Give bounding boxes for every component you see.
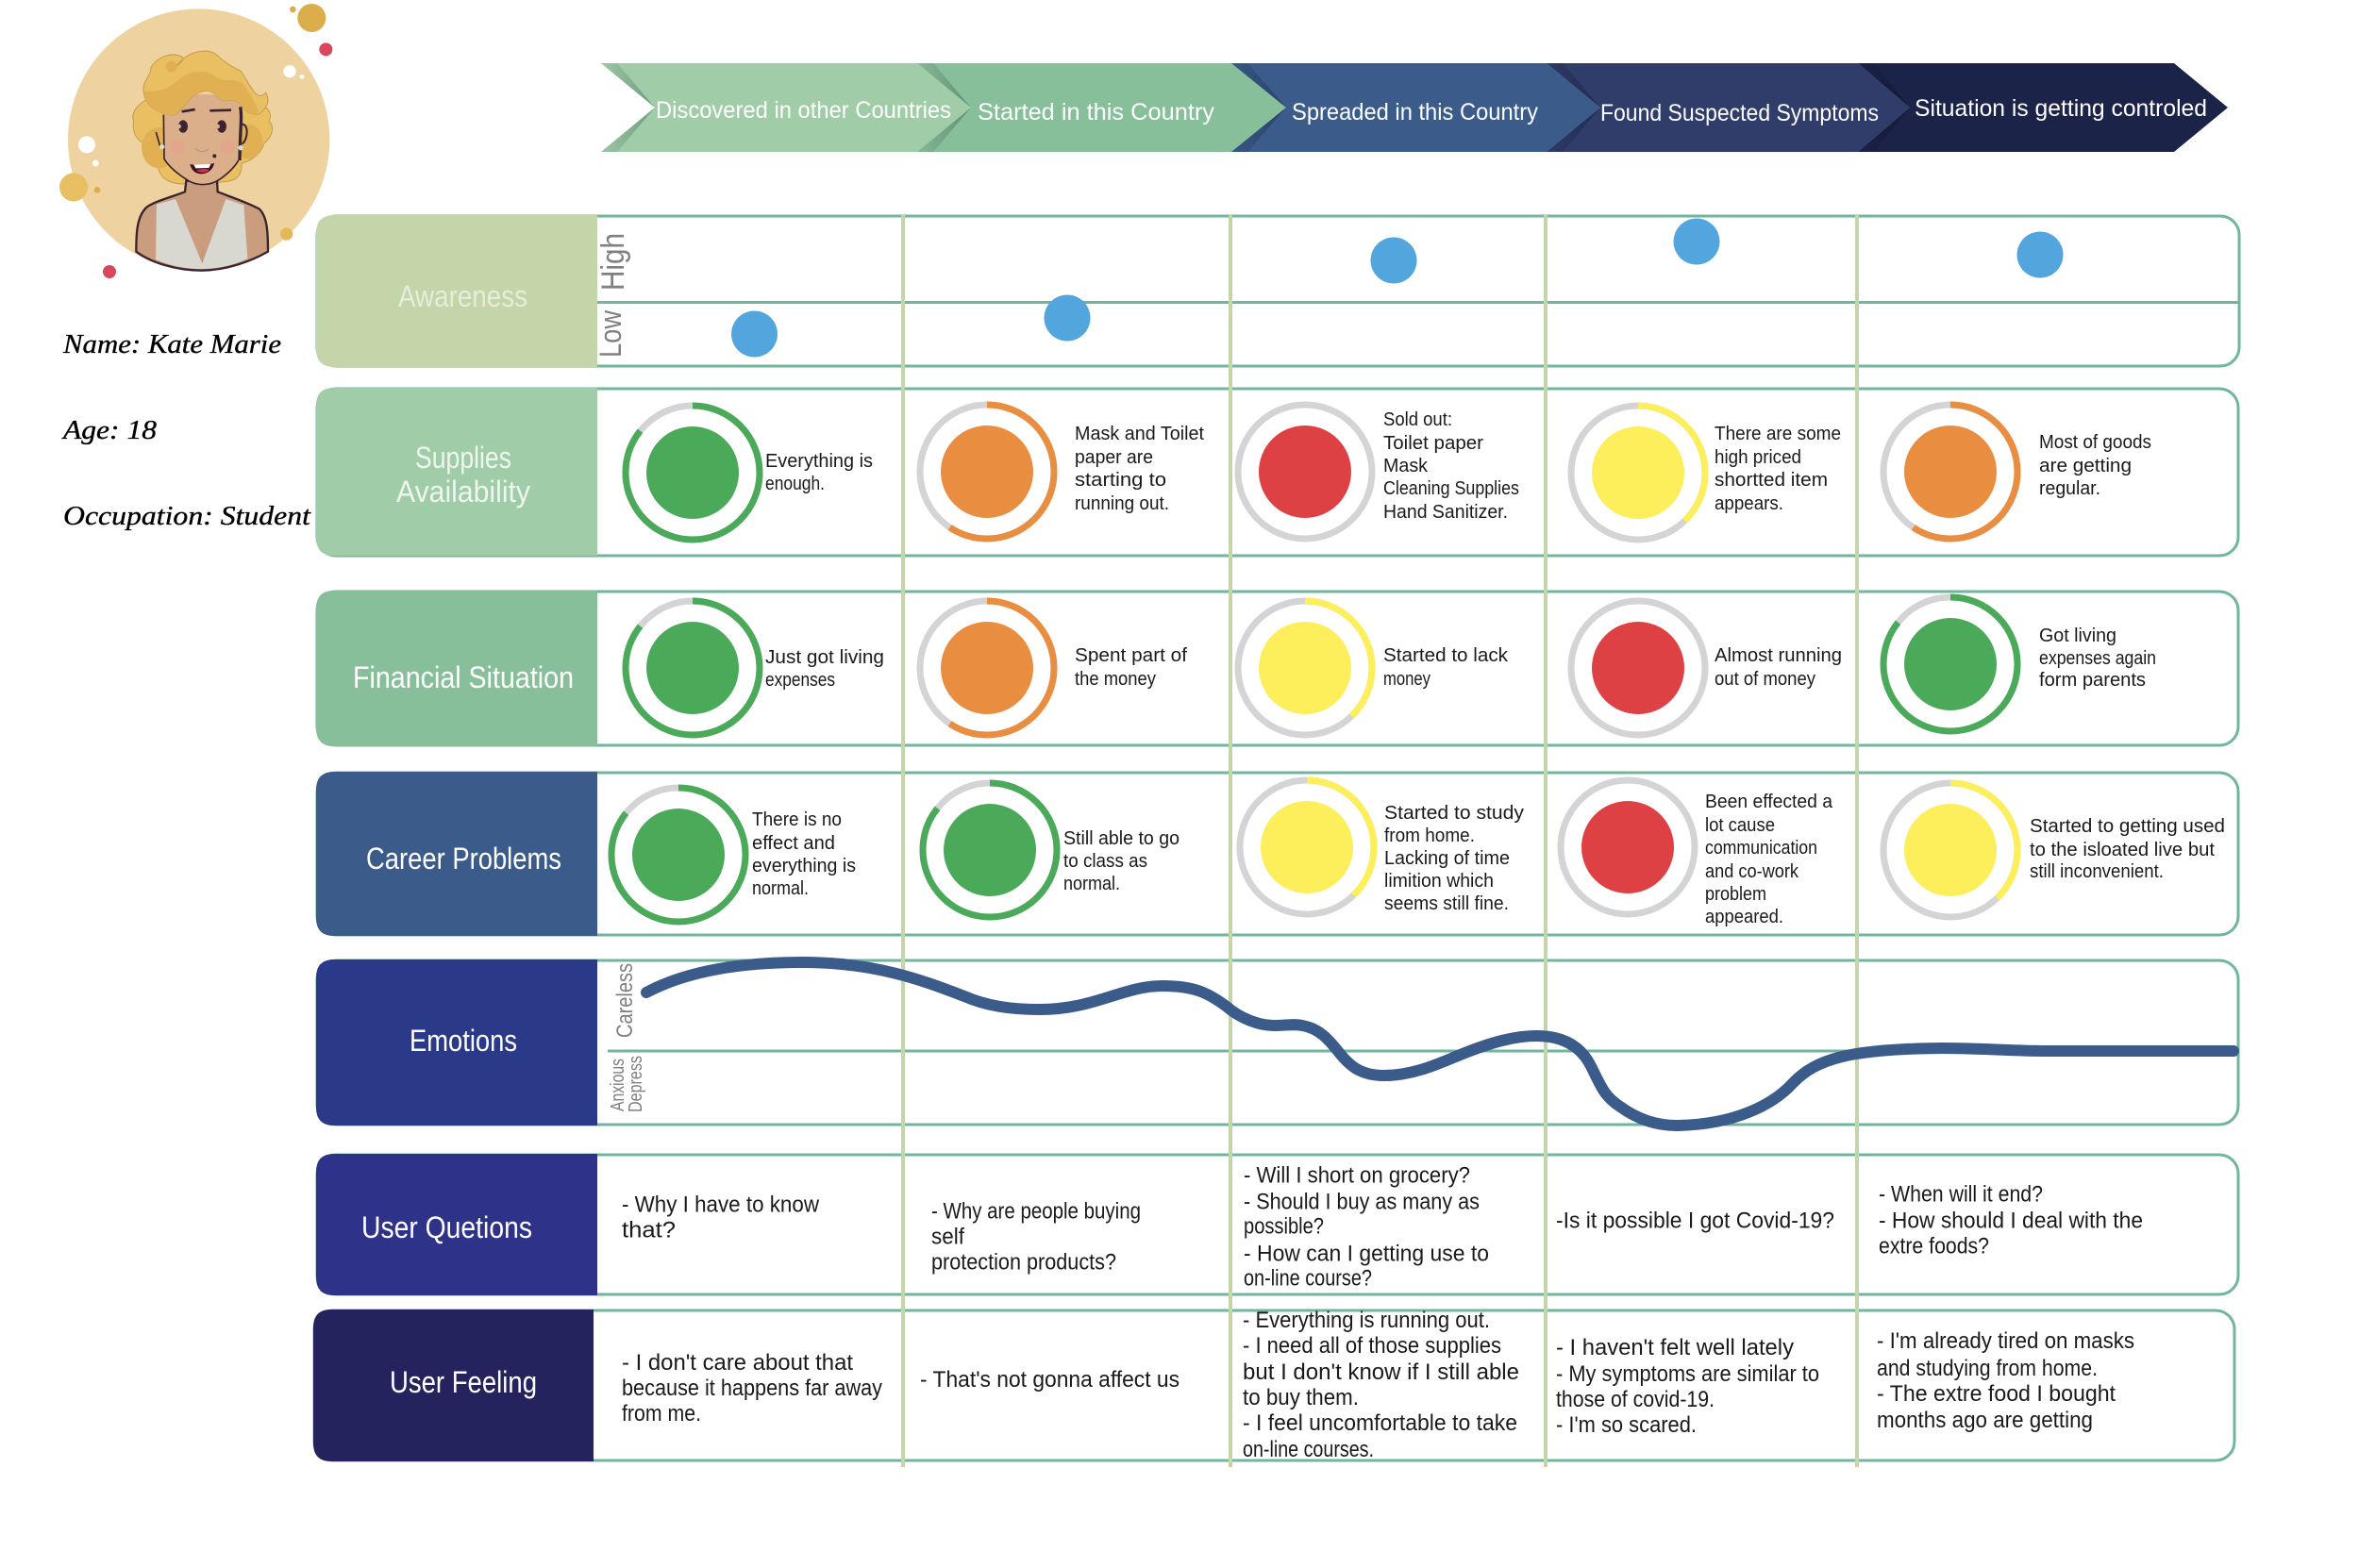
user questions cell text: on-line course?	[1244, 1266, 1372, 1291]
panel: user questions row: User Quetions	[361, 1210, 532, 1244]
career cell text: normal.	[1063, 874, 1120, 894]
user feeling cell text: - I need all of those supplies	[1243, 1333, 1501, 1359]
stage 2: started: Started in this Country	[978, 99, 1215, 125]
panel: financial situation row	[316, 591, 2238, 746]
user feeling cell text: to buy them.	[1243, 1385, 1359, 1410]
user feeling cell text: those of covid-19.	[1556, 1387, 1715, 1412]
panel: awareness row: Low	[594, 309, 627, 358]
financial cell text: Spent part of	[1075, 645, 1187, 666]
career cell text: normal.	[752, 878, 809, 899]
supplies cell text: Everything is	[765, 451, 873, 472]
career cell text: Still able to go	[1063, 828, 1180, 849]
user feeling cell text: - I'm so scared.	[1556, 1412, 1697, 1438]
career cell text: Been effected a	[1705, 792, 1833, 812]
financial cell text: Almost running	[1715, 645, 1842, 666]
career cell text: from home.	[1384, 826, 1475, 846]
user questions cell text: -Is it possible I got Covid-19?	[1556, 1208, 1834, 1234]
panel: emotions row: Anxious	[608, 1059, 628, 1111]
stage 1: discovered	[601, 63, 971, 152]
career cell text: There is no	[752, 809, 842, 830]
supplies cell text: enough.	[765, 474, 825, 494]
panel: awareness row: High	[595, 233, 631, 291]
supplies cell text: Hand Sanitizer.	[1383, 502, 1508, 523]
career cell text	[752, 792, 2225, 927]
career cell text: lot cause	[1705, 815, 1775, 836]
panel: user feeling row: User Feeling	[390, 1365, 537, 1399]
persona details: Occupation: Student	[63, 501, 311, 531]
supplies cell text: There are some	[1715, 424, 1841, 444]
career cell text: limition which	[1384, 871, 1494, 892]
career cell text: still inconvenient.	[2030, 861, 2164, 882]
career cell text: effect and	[752, 833, 835, 854]
supplies cell text: Mask and Toilet	[1075, 424, 1204, 444]
persona details: Name: Kate Marie	[62, 329, 281, 359]
financial status indicators	[626, 597, 2017, 735]
timeline chevrons	[601, 63, 2228, 152]
career cell text: Started to getting used	[2030, 816, 2225, 837]
career cell text: and co-work	[1705, 861, 1799, 882]
supplies cell text: appears.	[1715, 493, 1783, 514]
stage 4: symptoms: Found Suspected Symptoms	[1600, 100, 1879, 126]
panel: financial situation row: Financial Situation	[353, 660, 574, 694]
user questions cell text: extre foods?	[1879, 1234, 1989, 1259]
user questions cell text: - When will it end?	[1879, 1181, 2043, 1208]
user feeling cell text: - Everything is running out.	[1243, 1308, 1490, 1333]
panel: supplies availability row: Availability	[396, 475, 530, 509]
stage 5: controlled	[1858, 63, 2228, 152]
supplies status indicators	[626, 405, 2017, 540]
user questions cell text: that?	[622, 1217, 676, 1243]
persona avatar	[59, 4, 332, 278]
financial cell text	[765, 626, 2156, 691]
supplies cell text: starting to	[1075, 470, 1166, 491]
supplies cell text	[765, 409, 2151, 523]
career cell text: everything is	[752, 856, 856, 876]
financial cell text: expenses again	[2039, 648, 2156, 669]
user questions cell text: - Why are people buying	[931, 1198, 1141, 1225]
supplies cell text: are getting	[2039, 456, 2132, 476]
user feeling cell text: but I don't know if I still able	[1243, 1359, 1519, 1385]
financial cell text: Just got living	[765, 647, 884, 668]
panel: supplies availability row: Supplies	[415, 441, 511, 475]
user questions cell text: - How should I deal with the	[1879, 1208, 2143, 1234]
user feeling cell text: - The extre food I bought	[1877, 1381, 2116, 1407]
user questions cell text: - Why I have to know	[622, 1193, 820, 1217]
user feeling cell text: - I haven't felt well lately	[1556, 1335, 1794, 1360]
financial cell text: expenses	[765, 670, 835, 691]
supplies cell text: Sold out:	[1383, 409, 1452, 430]
user questions cell text: protection products?	[931, 1249, 1116, 1276]
stage 2: started	[917, 63, 1286, 152]
financial cell text: money	[1383, 669, 1430, 690]
user feeling cell text: - I feel uncomfortable to take	[1243, 1410, 1517, 1436]
supplies cell text: Mask	[1383, 456, 1429, 476]
career cell text: to the isloated live but	[2030, 840, 2215, 860]
emotion curve	[646, 962, 2234, 1126]
user feeling cell text: months ago are getting	[1877, 1408, 2093, 1433]
career cell text: Started to study	[1384, 803, 1524, 824]
panel: user feeling row	[313, 1309, 2234, 1461]
persona details	[61, 329, 311, 531]
stage 3: spreaded: Spreaded in this Country	[1292, 99, 1538, 125]
user feeling cell text: - I'm already tired on masks	[1877, 1328, 2134, 1354]
career status indicators	[611, 780, 2017, 922]
panel: awareness row: Awareness	[398, 279, 527, 313]
supplies cell text: high priced	[1715, 447, 1801, 468]
career cell text: seems still fine.	[1384, 893, 1509, 914]
career cell text: Lacking of time	[1384, 848, 1510, 869]
career cell text: to class as	[1063, 851, 1147, 872]
supplies cell text: running out.	[1075, 493, 1169, 514]
supplies cell text: paper are	[1075, 447, 1153, 468]
financial cell text: out of money	[1715, 669, 1815, 690]
user questions cell text: possible?	[1244, 1213, 1324, 1240]
stage column dividers	[903, 215, 1857, 1467]
user feeling cell text: - I don't care about that	[622, 1350, 853, 1376]
stage 4: symptoms	[1547, 63, 1910, 152]
awareness dots	[731, 219, 2063, 357]
panel: awareness row	[316, 215, 2239, 367]
stage 3: spreaded	[1231, 63, 1600, 152]
user feeling cell text: from me.	[622, 1401, 701, 1426]
panel: career problems row	[316, 772, 2238, 936]
user questions cell text: - Will I short on grocery?	[1244, 1162, 1470, 1189]
career cell text: problem	[1705, 884, 1766, 905]
persona details: Age: 18	[61, 415, 158, 445]
panel: emotions row: Careless	[612, 963, 638, 1038]
user feeling cell text	[622, 1308, 2134, 1462]
user feeling cell text: because it happens far away	[622, 1376, 882, 1401]
user feeling cell text: and studying from home.	[1877, 1356, 2098, 1381]
stage 5: controlled: Situation is getting controled	[1915, 95, 2207, 122]
supplies cell text: regular.	[2039, 478, 2100, 499]
financial cell text: form parents	[2039, 670, 2146, 691]
user questions cell text	[622, 1162, 2143, 1291]
panel: supplies availability row	[316, 388, 2238, 556]
supplies cell text: Cleaning Supplies	[1383, 478, 1519, 499]
panel: emotions row: Depress	[626, 1056, 646, 1112]
career cell text: communication	[1705, 838, 1817, 859]
user feeling cell text: - My symptoms are similar to	[1556, 1361, 1819, 1387]
financial cell text: Started to lack	[1383, 645, 1509, 666]
supplies cell text: Toilet paper	[1383, 433, 1483, 454]
panel: emotions row	[316, 959, 2238, 1126]
panel: emotions row: Emotions	[410, 1024, 517, 1058]
panel: user questions row	[316, 1154, 2238, 1295]
supplies cell text: Most of goods	[2039, 432, 2151, 453]
user questions cell text: self	[931, 1225, 964, 1249]
user feeling cell text: - That's not gonna affect us	[920, 1367, 1180, 1393]
career cell text: appeared.	[1705, 907, 1783, 927]
financial cell text: Got living	[2039, 626, 2116, 646]
financial cell text: the money	[1075, 669, 1156, 690]
panel: career problems row: Career Problems	[366, 842, 561, 876]
user feeling cell text: on-line courses.	[1243, 1437, 1374, 1462]
user questions cell text: - Should I buy as many as	[1244, 1189, 1480, 1215]
supplies cell text: shortted item	[1715, 470, 1828, 491]
stage 1: discovered: Discovered in other Countries	[656, 97, 951, 124]
user questions cell text: - How can I getting use to	[1244, 1242, 1489, 1266]
